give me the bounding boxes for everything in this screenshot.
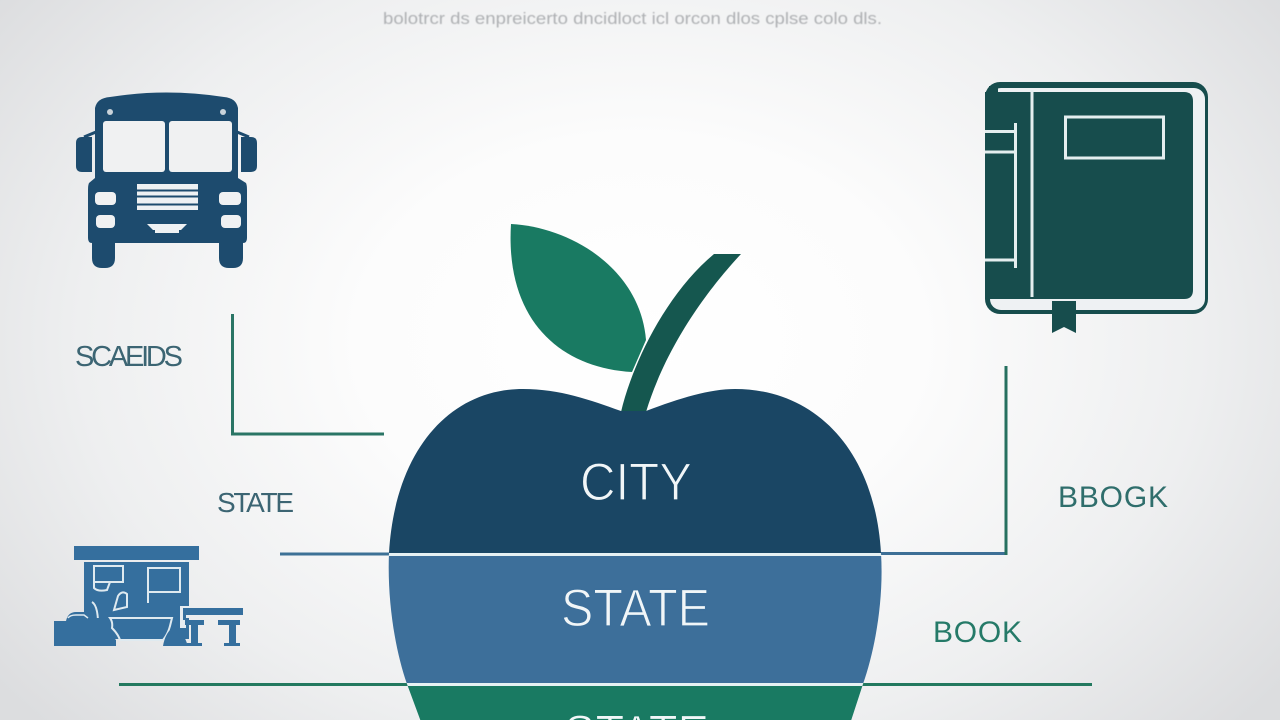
apple stem	[621, 254, 741, 412]
connector: right bracket	[878, 366, 1006, 555]
connector: upper left bracket	[232, 314, 384, 434]
icon: school bus	[76, 92, 257, 268]
subtitle text: bolotrcr ds enpreicerto dncidloct icl orcon dlos cplse colo dls.	[383, 9, 882, 28]
apple section: state	[380, 556, 890, 683]
apple body	[380, 380, 890, 720]
label: SCAEIDS: SCAEIDS	[75, 341, 183, 373]
apple section: city	[380, 380, 890, 553]
label: BOOK: BOOK	[933, 616, 1022, 649]
connector: bottom line	[119, 683, 1092, 686]
label: BBOGK: BBOGK	[1058, 481, 1168, 514]
icon: notebook	[985, 82, 1208, 333]
apple section: lower state	[408, 686, 862, 720]
apple leaf	[511, 224, 646, 372]
connector: state line left	[280, 552, 392, 556]
apple section: city: CITY	[580, 453, 692, 512]
apple section: state: STATE	[561, 579, 710, 638]
label: STATE left: STATE	[217, 487, 294, 518]
icon: school building	[54, 546, 243, 646]
